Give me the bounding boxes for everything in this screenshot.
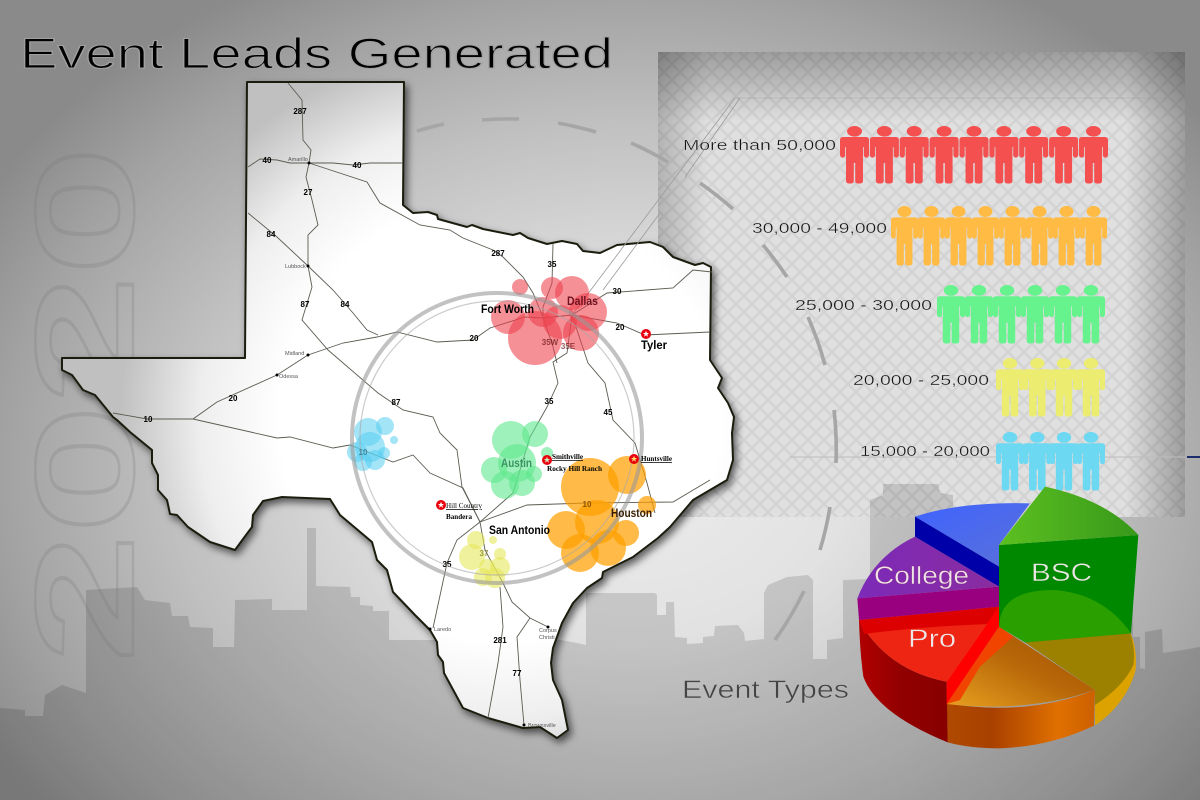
pie label: college: College — [874, 562, 969, 590]
row: more than 50,000: More than 50,000 — [683, 137, 836, 154]
bubbles: San Antonio (yellow) — [459, 531, 510, 588]
highway labels: 287 — [491, 249, 505, 258]
map: Texas — [62, 82, 740, 738]
highway labels: 40 — [353, 161, 362, 170]
pie label: BSC: BSC — [1031, 559, 1092, 587]
highway labels: 87 — [392, 398, 401, 407]
row: 30,000 - 49,000: 30,000 - 49,000 — [752, 220, 887, 237]
row: 15,000 - 20,000: 15,000 - 20,000 — [860, 443, 990, 460]
city names: Houston — [611, 506, 652, 520]
pictogram: red people — [840, 126, 1108, 184]
row: more than 50,000 — [683, 126, 1108, 184]
city names: Fort Worth — [481, 302, 534, 316]
highway labels: 87 — [301, 300, 310, 309]
highway labels — [144, 107, 625, 678]
row: 25,000 - 30,000: 25,000 - 30,000 — [795, 297, 932, 314]
labels over bubbles: 37 — [480, 549, 489, 558]
city names: Dallas — [567, 294, 598, 308]
row: 15,000 - 20,000 — [860, 432, 1105, 491]
labels over bubbles: 35W — [542, 338, 559, 347]
town markers and names: Corpus — [539, 628, 557, 634]
bubbles: West Texas (blue) — [347, 417, 398, 471]
bubbles: Austin (green) — [481, 421, 553, 499]
labels over bubbles: 10 — [583, 500, 592, 509]
bubbles: Dallas / Fort Worth (red) — [491, 276, 607, 365]
map outline — [62, 82, 734, 738]
city names: Tyler — [641, 338, 667, 352]
highway labels: 281 — [493, 636, 507, 645]
town markers and names: Amarillo — [288, 157, 308, 163]
highway labels: 35 — [545, 397, 554, 406]
pictogram: orange people — [891, 206, 1107, 266]
row: 20,000 - 25,000 — [853, 358, 1105, 417]
pictogram: blue people — [996, 432, 1105, 491]
large dashed arc — [417, 119, 836, 640]
ranch location labels — [446, 452, 673, 521]
highways — [113, 83, 712, 725]
highway labels: 77 — [513, 669, 522, 678]
highway labels: 20 — [616, 323, 625, 332]
highway labels: 10 — [144, 415, 153, 424]
highway labels: 84 — [341, 300, 350, 309]
labels over bubbles — [359, 338, 592, 558]
panel: hatched backdrop — [658, 52, 1200, 517]
highway labels: 27 — [304, 188, 313, 197]
row: 20,000 - 25,000: 20,000 - 25,000 — [853, 372, 989, 389]
title: Event Leads Generated — [20, 30, 613, 78]
ranch location labels: Hill Country — [446, 501, 482, 510]
ranch location labels: Huntsville — [641, 454, 673, 463]
row: 25,000 - 30,000 — [795, 285, 1105, 344]
town markers and names: Odessa — [279, 374, 299, 380]
highway labels: 35 — [548, 260, 557, 269]
town markers and names: Midland — [285, 351, 304, 357]
highway labels: 20 — [229, 394, 238, 403]
town markers and names: Brownsville — [528, 723, 556, 729]
labels over bubbles: 35E — [561, 342, 576, 351]
highway labels: 40 — [263, 156, 272, 165]
town markers and names — [276, 157, 557, 729]
pictogram: yellow people — [996, 358, 1105, 417]
pie label: pro: Pro — [908, 625, 956, 653]
radar rings — [352, 293, 642, 583]
town markers and names: Laredo — [434, 627, 451, 633]
city names — [481, 294, 667, 537]
highway labels: 35 — [443, 560, 452, 569]
highway labels: 287 — [293, 107, 307, 116]
background skyline — [0, 484, 1200, 800]
thin frame line above rows — [735, 97, 1185, 99]
highway labels: 45 — [604, 408, 613, 417]
pictogram: green people — [937, 285, 1105, 344]
ranch location labels: Rocky Hill Ranch — [547, 464, 603, 473]
3D pie chart — [857, 487, 1138, 748]
city names: San Antonio — [489, 523, 550, 537]
event types caption: Event Types — [682, 676, 849, 704]
town markers and names: Christi — [539, 635, 555, 641]
labels over bubbles: 10 — [359, 448, 368, 457]
row: 30,000 - 49,000 — [752, 206, 1107, 266]
city names: Austin — [501, 456, 532, 470]
bubbles: Houston (orange) — [547, 456, 656, 572]
ranch location labels: Bandera — [446, 512, 472, 521]
vertical year: 2020: 2020 — [6, 146, 163, 663]
location stars — [436, 329, 651, 510]
pie slices — [857, 487, 1138, 748]
highway labels: 30 — [613, 287, 622, 296]
ranch location labels: Smithville — [552, 452, 584, 461]
town markers and names: Lubbock — [285, 264, 306, 270]
connector lines from panel to Dallas — [572, 98, 740, 315]
highway labels: 20 — [470, 334, 479, 343]
highway labels: 84 — [267, 230, 276, 239]
